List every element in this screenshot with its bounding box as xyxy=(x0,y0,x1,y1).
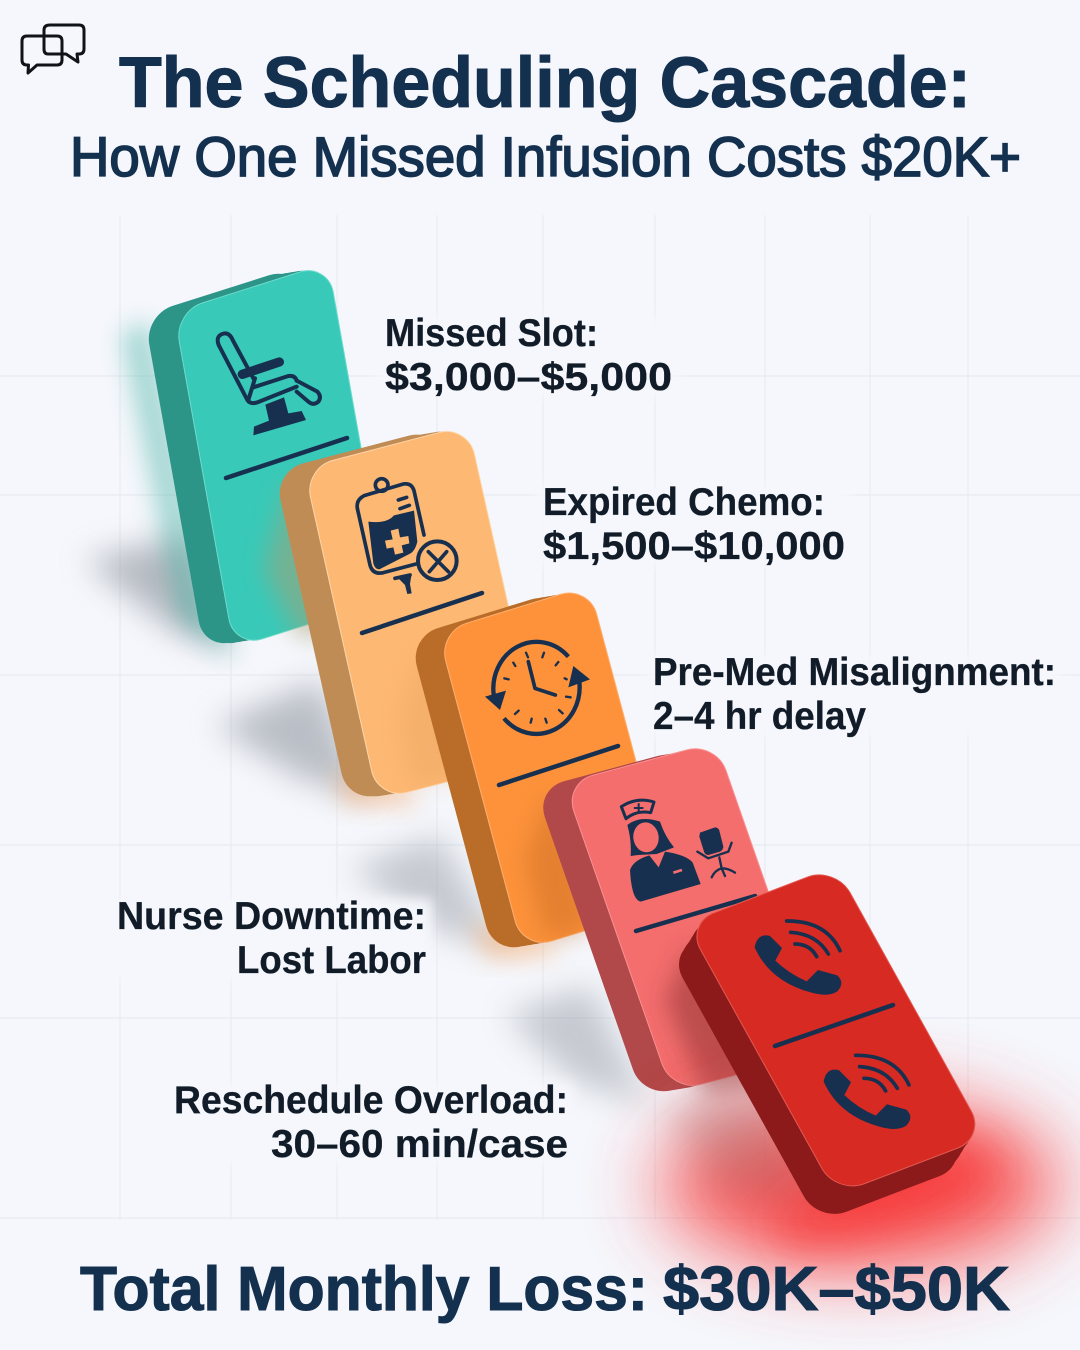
divider line xyxy=(499,746,618,785)
label: expired chemo: $1,500–$10,000 xyxy=(543,525,845,568)
label: reschedule overload: Reschedule Overload: xyxy=(174,1079,568,1122)
icon: expired IV bag xyxy=(357,479,457,594)
label: reschedule overload xyxy=(168,1079,573,1166)
domino 5: reschedule overload xyxy=(668,866,986,1222)
label: pre-med misalignment xyxy=(646,651,1061,738)
domino 3: pre-med misalignment xyxy=(350,586,674,958)
shadow cast on domino 4 xyxy=(665,945,775,1095)
divider line xyxy=(636,896,755,931)
icon: chat bubbles xyxy=(22,25,84,73)
divider line xyxy=(226,438,347,478)
label: missed slot: $3,000–$5,000 xyxy=(385,356,672,399)
domino 2: expired chemo xyxy=(215,425,542,805)
title: The Scheduling Cascade: xyxy=(119,44,971,123)
icon: clock with arrows xyxy=(485,642,590,734)
icon: nurse and empty chair xyxy=(621,800,735,902)
red glow xyxy=(660,1090,1060,1270)
label: expired chemo: Expired Chemo: xyxy=(543,481,825,524)
icon: ringing phone bottom xyxy=(824,1055,910,1129)
shadow cast on domino 3 xyxy=(525,790,590,940)
shadow cast on domino 2 xyxy=(400,650,470,785)
icon: infusion chair xyxy=(218,333,320,435)
total monthly loss xyxy=(80,1255,1010,1324)
domino 1: missed slot xyxy=(85,263,388,658)
label: nurse downtime xyxy=(110,895,432,982)
domino 4: nurse downtime xyxy=(505,742,824,1105)
label: missed slot: Missed Slot: xyxy=(385,312,598,355)
label: nurse downtime: Nurse Downtime: xyxy=(117,895,426,938)
shadow cast on domino 1 xyxy=(265,480,375,640)
label: expired chemo xyxy=(536,481,851,568)
label: pre-med misalignment: 2–4 hr delay xyxy=(653,695,867,738)
label: nurse downtime: Lost Labor xyxy=(237,939,426,982)
total monthly loss: Total Monthly Loss: xyxy=(80,1255,648,1324)
subtitle: How One Missed Infusion Costs $20K+ xyxy=(70,125,1021,188)
label: pre-med misalignment: Pre-Med Misalignment: xyxy=(653,651,1056,694)
total monthly loss: $30K–$50K xyxy=(663,1255,1010,1324)
icon: ringing phone top xyxy=(755,921,841,995)
label: missed slot xyxy=(378,312,678,399)
label: reschedule overload: 30–60 min/case xyxy=(271,1123,568,1166)
divider line xyxy=(362,593,482,633)
divider line xyxy=(775,1005,893,1046)
